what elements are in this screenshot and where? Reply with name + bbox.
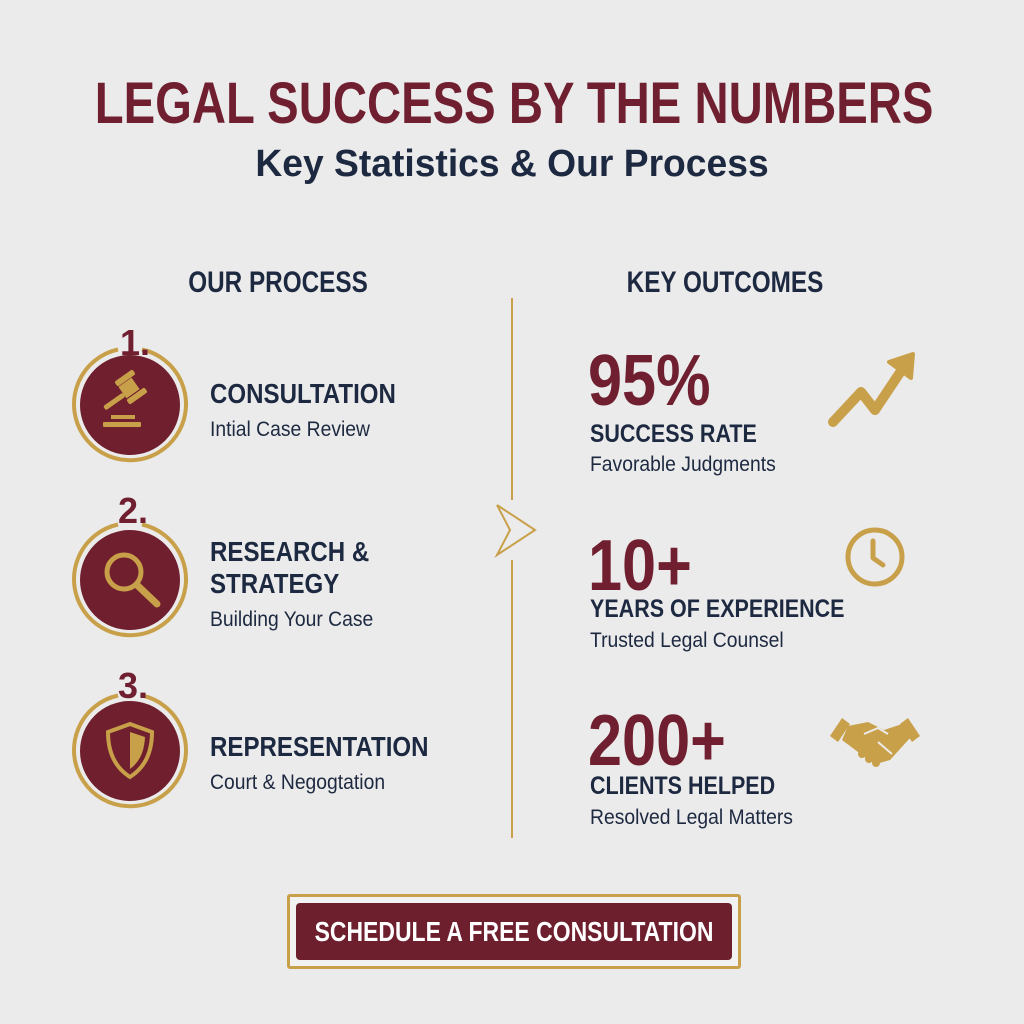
outcome 2 text: Trusted Legal Counsel <box>590 629 784 652</box>
icon: trend arrow <box>828 352 915 427</box>
step 1 title: CONSULTATION <box>210 378 396 409</box>
step 1 <box>72 322 396 462</box>
outcome 1 <box>588 341 915 476</box>
step 2 icon <box>72 522 188 638</box>
outcome 3 text: Resolved Legal Matters <box>590 806 793 829</box>
step 1 icon <box>72 348 188 462</box>
heading: our process: OUR PROCESS <box>188 266 368 299</box>
step 2 text: Building Your Case <box>210 608 373 631</box>
step 1 text: Intial Case Review <box>210 418 370 441</box>
button <box>287 894 741 969</box>
heading: key outcomes: KEY OUTCOMES <box>627 266 823 299</box>
step 2 number: 2. <box>118 490 148 531</box>
step 3 text: Court & Negogtation <box>210 771 385 794</box>
outcome 1 text: Favorable Judgments <box>590 453 776 476</box>
step 2 title: RESEARCH & <box>210 536 369 567</box>
outcome 3 number: 200+ <box>588 701 726 781</box>
outcome 3 <box>588 701 920 829</box>
step 3 title: REPRESENTATION <box>210 731 429 762</box>
step 2 <box>72 490 373 638</box>
step 2 title <box>210 536 369 599</box>
icon: clock <box>846 528 904 586</box>
outcome 1 label: SUCCESS RATE <box>590 420 757 448</box>
button label <box>296 903 732 960</box>
step 3 number: 3. <box>118 665 148 706</box>
icon: handshake <box>830 718 920 767</box>
step 1 number: 1. <box>120 322 150 363</box>
step 3 icon <box>72 694 188 808</box>
step 2 title: STRATEGY <box>210 568 339 599</box>
outcome 2 <box>588 526 904 652</box>
step 3 <box>72 665 429 808</box>
outcome 3 label: CLIENTS HELPED <box>590 772 775 800</box>
title: LEGAL SUCCESS BY THE NUMBERS <box>95 71 933 136</box>
button label: SCHEDULE A FREE CONSULTATION <box>315 916 713 947</box>
outcome 1 number: 95% <box>588 341 710 421</box>
outcome 2 label: YEARS OF EXPERIENCE <box>590 595 844 623</box>
outcome 2 number: 10+ <box>588 526 692 606</box>
subtitle: Key Statistics & Our Process <box>255 143 769 185</box>
